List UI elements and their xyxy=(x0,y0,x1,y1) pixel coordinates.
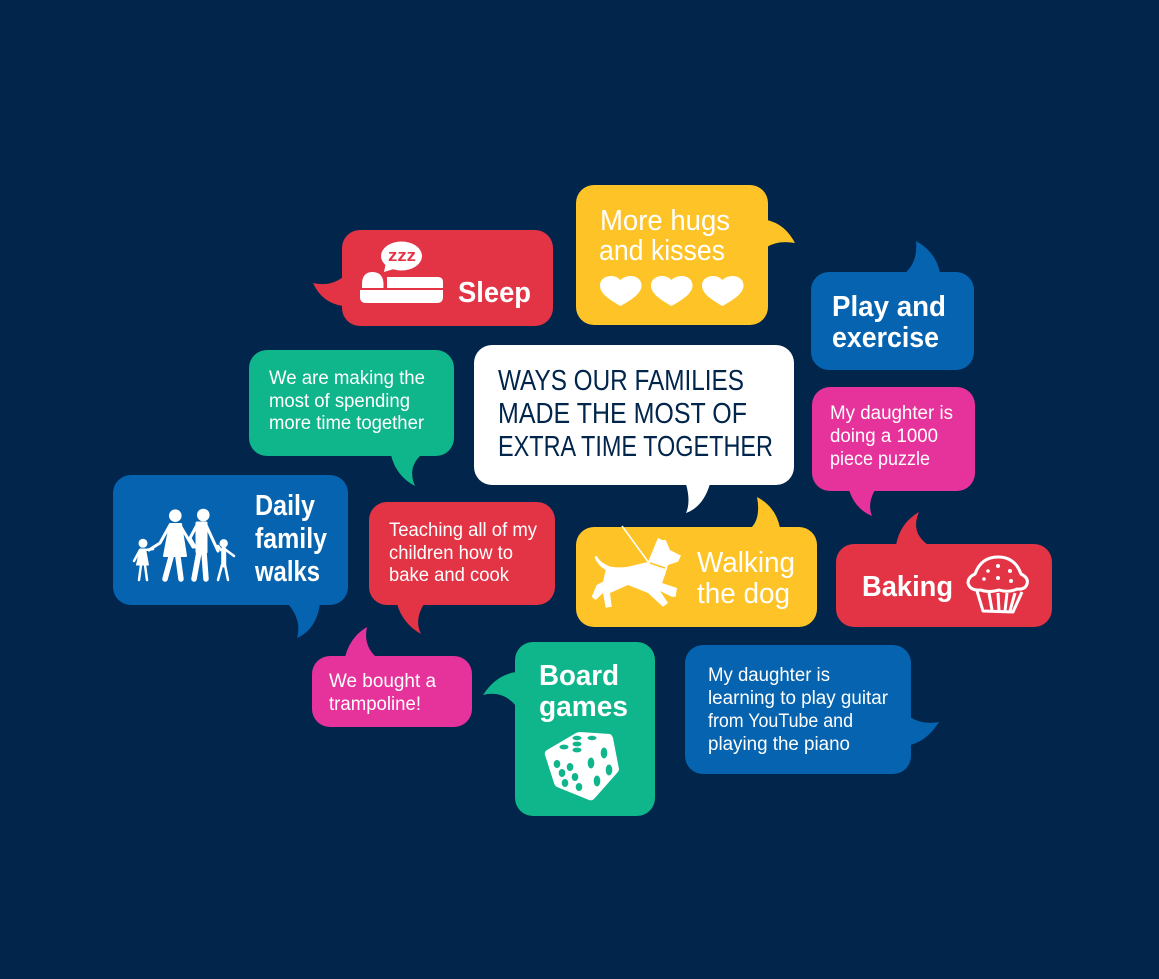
panel: title: WAYS OUR FAMILIES xyxy=(498,365,744,397)
panel: 1000 piece puzzle: doing a 1000 xyxy=(830,426,938,447)
icon: sleeping person in bed xyxy=(360,242,443,303)
panel: Daily family walks: family xyxy=(255,523,327,555)
panel: teaching children to bake: Teaching all of my xyxy=(389,520,537,541)
panel: title xyxy=(474,345,794,513)
icon: die xyxy=(545,732,619,800)
panel: More hugs and kisses xyxy=(576,185,795,325)
panel: Board games xyxy=(483,642,655,816)
panel: trampoline: We bought a xyxy=(329,671,436,692)
icon: dog on a leash xyxy=(592,526,681,608)
icon: sleeping person in bed: zzz xyxy=(388,246,416,265)
panel: Daily family walks: Daily xyxy=(255,490,315,522)
panel: Board games: games xyxy=(539,691,628,723)
panel: Play and exercise: Play and xyxy=(832,291,946,323)
panel: making the most of spending time: more time together xyxy=(269,413,425,434)
panel: trampoline: trampoline! xyxy=(329,694,421,715)
panel: title: EXTRA TIME TOGETHER xyxy=(498,431,773,463)
panel: guitar and piano: My daughter is xyxy=(708,665,830,686)
panel: trampoline xyxy=(312,627,472,727)
icon: three hearts xyxy=(600,276,744,306)
panel: Walking the dog: Walking xyxy=(697,547,795,579)
panel: 1000 piece puzzle: My daughter is xyxy=(830,403,953,424)
panel: More hugs and kisses: More hugs xyxy=(600,205,730,237)
panel: Sleep: Sleep xyxy=(458,277,531,309)
icon: cupcake xyxy=(968,557,1027,612)
panel: Daily family walks xyxy=(113,475,348,638)
icon: family walking xyxy=(134,509,234,580)
panel: making the most of spending time: We are making the xyxy=(269,368,425,389)
panel: guitar and piano: learning to play guitar xyxy=(708,688,889,709)
panel: More hugs and kisses: and kisses xyxy=(599,235,725,267)
panel: teaching children to bake xyxy=(369,502,555,634)
panel: Baking xyxy=(836,512,1052,627)
panel: guitar and piano: from YouTube and xyxy=(708,711,853,732)
panel: making the most of spending time: most of spending xyxy=(269,391,410,412)
panel: 1000 piece puzzle xyxy=(812,387,975,516)
panel: Play and exercise xyxy=(811,241,974,370)
panel: teaching children to bake: bake and cook xyxy=(389,565,509,586)
panel: 1000 piece puzzle: piece puzzle xyxy=(830,449,930,470)
panel: guitar and piano: playing the piano xyxy=(708,734,850,755)
panel: making the most of spending time xyxy=(249,350,454,486)
panel: guitar and piano xyxy=(685,645,939,774)
panel: Play and exercise: exercise xyxy=(832,322,939,354)
panel: Walking the dog xyxy=(576,497,817,627)
panel: teaching children to bake: children how to xyxy=(389,543,513,564)
panel: Walking the dog: the dog xyxy=(697,578,790,610)
panel: Baking: Baking xyxy=(862,571,953,603)
panel: Board games: Board xyxy=(539,660,619,692)
panel: Daily family walks: walks xyxy=(254,556,320,588)
panel: title: MADE THE MOST OF xyxy=(498,398,747,430)
panel: Sleep xyxy=(313,230,553,326)
